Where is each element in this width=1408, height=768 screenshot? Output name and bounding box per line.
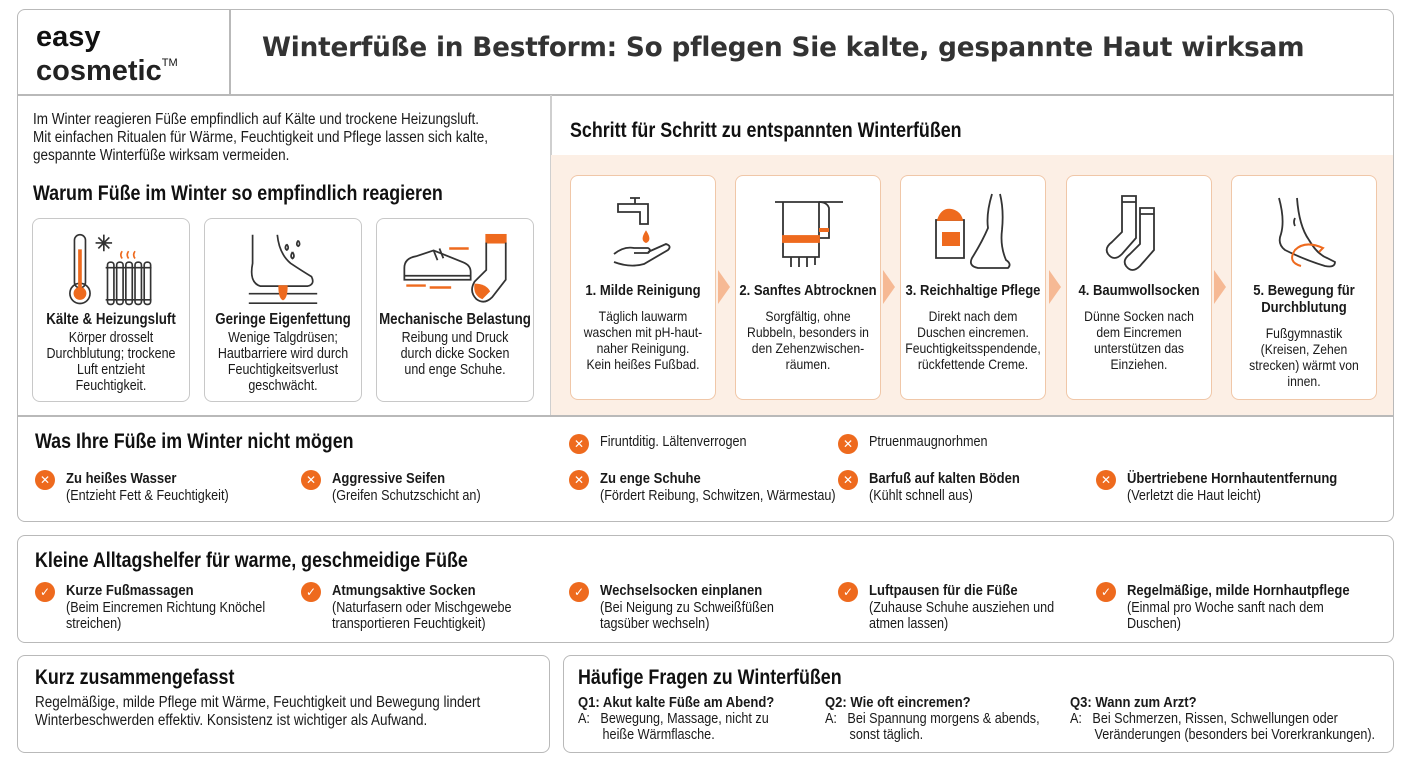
step 3: 3. Reichhaltige Pflege — [906, 282, 1040, 299]
item: enge Schuhe: Zu enge Schuhe — [600, 470, 701, 487]
item 5: (Einmal pro Woche sanft nach dem — [1127, 600, 1324, 616]
panel: alltagshelfer — [17, 535, 1394, 643]
item: heißes Wasser — [35, 470, 229, 504]
item 2 — [301, 582, 512, 632]
heading: warum: Warum Füße im Winter so empfindlich reagieren — [33, 182, 443, 205]
item 5 — [1096, 582, 1350, 632]
card: Kälte: Körper drosselt — [69, 330, 153, 346]
card: Kälte: Durchblutung; trockene — [47, 346, 175, 362]
item 4 — [838, 582, 1054, 632]
panel: FAQ — [563, 655, 1394, 753]
item: heißes Wasser: Zu heißes Wasser — [66, 470, 176, 487]
item 3: Wechselsocken einplanen — [600, 582, 762, 599]
text: ✕ — [574, 437, 584, 451]
panel: alltagshelfer: ✓ — [40, 585, 50, 599]
heading: Kleine Alltagshelfer für warme, geschmeidige Füße — [35, 549, 468, 572]
step 3: rückfettende Creme. — [918, 356, 1028, 372]
item: garbled 2: Ptruenmaugnorhmen — [869, 434, 988, 450]
intro text: gespannte Winterfüße wirksam vermeiden. — [33, 147, 289, 164]
step 2 — [735, 175, 881, 400]
heading: schritte: Schritt für Schritt zu entspannten Winterfüßen — [570, 119, 962, 142]
item: Hornhaut: Übertriebene Hornhautentfernung — [1127, 470, 1337, 487]
panel: alltagshelfer: ✓ — [843, 585, 853, 599]
item: garbled 1 — [569, 434, 747, 454]
card: Mechanische Belastung: und enge Schuhe. — [404, 362, 506, 378]
item: garbled 1: Firuntditig. Lältenverrogen — [600, 434, 747, 450]
text: ✕ — [574, 473, 584, 487]
Q2 — [825, 694, 1040, 743]
step 1 — [570, 175, 716, 400]
step 2: Sorgfältig, ohne — [765, 308, 851, 324]
Q1: A: Bewegung, Massage, nicht zu — [578, 711, 769, 727]
intro text: Mit einfachen Ritualen für Wärme, Feuchtigkeit und Pflege lassen sich kalte, — [33, 129, 488, 146]
item 1: (Beim Eincremen Richtung Knöchel — [66, 600, 265, 616]
step 5 — [1231, 175, 1377, 400]
Q2: sonst täglich. — [850, 727, 923, 743]
arrow — [1049, 270, 1061, 304]
item: Seifen: (Greifen Schutzschicht an) — [332, 488, 481, 504]
logo: easy — [36, 21, 101, 53]
card: Eigenfettung: Wenige Talgdrüsen; — [228, 330, 338, 346]
card: Eigenfettung: Hautbarriere wird durch — [218, 346, 348, 362]
card: Eigenfettung: Geringe Eigenfettung — [215, 311, 351, 328]
intro text: Im Winter reagieren Füße empfindlich auf Kälte und trockene Heizungsluft. — [33, 111, 479, 128]
text: Winterbeschwerden effektiv. Konsistenz ist wichtiger als Aufwand. — [35, 712, 427, 729]
item: Seifen: Aggressive Seifen — [332, 470, 445, 487]
step 1: 1. Milde Reinigung — [585, 282, 701, 299]
item 3: (Bei Neigung zu Schweißfüßen — [600, 600, 774, 616]
card: Mechanische Belastung: durch dicke Socken — [401, 346, 509, 362]
text: ✕ — [843, 437, 853, 451]
item 2: Atmungsaktive Socken — [332, 582, 476, 599]
card: Mechanische Belastung — [376, 218, 534, 402]
item: heißes Wasser: (Entzieht Fett & Feuchtigkeit) — [66, 488, 229, 504]
step 5: Fußgymnastik — [1266, 325, 1342, 341]
item: Barfuß: (Kühlt schnell aus) — [869, 488, 973, 504]
step 5: strecken) wärmt von — [1249, 357, 1359, 373]
item: Hornhaut — [1096, 470, 1337, 504]
logo — [36, 21, 178, 87]
item 5: Regelmäßige, milde Hornhautpflege — [1127, 582, 1350, 599]
card: Kälte: Feuchtigkeit. — [76, 378, 146, 394]
logo: cosmeticTM — [36, 55, 178, 87]
panel: alltagshelfer: ✓ — [1101, 585, 1111, 599]
item 1 — [35, 582, 265, 632]
card: Kälte: Luft entzieht — [77, 362, 145, 378]
panel: steps background — [551, 155, 1393, 415]
card: Mechanische Belastung: Reibung und Druck — [402, 330, 508, 346]
arrow — [1214, 270, 1226, 304]
Q3: Veränderungen (besonders bei Vorerkrankungen). — [1095, 727, 1375, 743]
card: Kälte: Kälte & Heizungsluft — [46, 311, 176, 328]
item 3 — [569, 582, 774, 632]
Q3: Q3: Wann zum Arzt? — [1070, 694, 1197, 711]
item 2: (Naturfasern oder Mischgewebe — [332, 600, 512, 616]
step 2: räumen. — [786, 356, 830, 372]
Q2: Q2: Wie oft eincremen? — [825, 694, 971, 711]
title: Winterfüße in Bestform: So pflegen Sie kalte, gespannte Haut wirksam — [262, 33, 1304, 63]
Q1: heiße Wärmflasche. — [603, 727, 715, 743]
step 5: (Kreisen, Zehen — [1261, 341, 1347, 357]
main frame — [17, 9, 1394, 522]
item: Seifen — [301, 470, 481, 504]
step 4 — [1066, 175, 1212, 400]
text: ✕ — [40, 473, 50, 487]
card: Kälte — [32, 218, 190, 402]
arrow — [718, 270, 730, 304]
panel: alltagshelfer: ✓ — [306, 585, 316, 599]
item 4: (Zuhause Schuhe ausziehen und — [869, 600, 1054, 616]
card: Mechanische Belastung: Mechanische Belastung — [379, 311, 531, 328]
step 3: Direkt nach dem — [929, 308, 1017, 324]
text: Regelmäßige, milde Pflege mit Wärme, Feuchtigkeit und Bewegung lindert — [35, 694, 480, 711]
step 2: den Zehenzwischen- — [752, 340, 864, 356]
card: Eigenfettung: Feuchtigkeitsverlust — [228, 362, 338, 378]
heading: Kurz zusammengefasst — [35, 666, 234, 689]
step 1: waschen mit pH-haut- — [584, 324, 702, 340]
item 4: atmen lassen) — [869, 616, 948, 632]
heading: nicht mögen: Was Ihre Füße im Winter nicht mögen — [35, 430, 354, 453]
item: Barfuß — [838, 470, 1020, 504]
Q3: A: Bei Schmerzen, Rissen, Schwellungen oder — [1070, 711, 1338, 727]
text: ✕ — [306, 473, 316, 487]
text: ✕ — [1101, 473, 1111, 487]
step 1: naher Reinigung. — [597, 340, 689, 356]
card: Eigenfettung — [204, 218, 362, 402]
Q1: Q1: Akut kalte Füße am Abend? — [578, 694, 774, 711]
item 1: streichen) — [66, 616, 121, 632]
step 5: 5. Bewegung für — [1253, 282, 1355, 299]
item 1: Kurze Fußmassagen — [66, 582, 194, 599]
step 4: dem Eincremen — [1096, 324, 1182, 340]
step 4: Dünne Socken nach — [1084, 308, 1194, 324]
item: enge Schuhe: (Fördert Reibung, Schwitzen, Wärmestau) — [600, 488, 836, 504]
step 4: unterstützen das — [1094, 340, 1184, 356]
step 3: Duschen eincremen. — [917, 324, 1029, 340]
item: Barfuß: Barfuß auf kalten Böden — [869, 470, 1020, 487]
Q3 — [1070, 694, 1375, 743]
step 2: 2. Sanftes Abtrocknen — [739, 282, 877, 299]
item: Hornhaut: (Verletzt die Haut leicht) — [1127, 488, 1261, 504]
Q1 — [578, 694, 774, 743]
item: enge Schuhe — [569, 470, 836, 504]
text — [35, 694, 480, 729]
panel: zusammenfassung — [17, 655, 550, 753]
step 1: Täglich lauwarm — [599, 308, 687, 324]
item 3: tagsüber wechseln) — [600, 616, 709, 632]
text: ✕ — [843, 473, 853, 487]
step 3 — [900, 175, 1046, 400]
panel: alltagshelfer: ✓ — [574, 585, 584, 599]
Q2: A: Bei Spannung morgens & abends, — [825, 711, 1040, 727]
heading: Häufige Fragen zu Winterfüßen — [578, 666, 842, 689]
arrow — [883, 270, 895, 304]
item: garbled 2 — [838, 434, 988, 454]
step 3: Feuchtigkeitsspendende, — [905, 340, 1041, 356]
step 5: innen. — [1287, 373, 1321, 389]
card: Eigenfettung: geschwächt. — [248, 378, 318, 394]
step 2: Rubbeln, besonders in — [747, 324, 869, 340]
step 1: Kein heißes Fußbad. — [586, 356, 700, 372]
item 2: transportieren Feuchtigkeit) — [332, 616, 486, 632]
step 4: 4. Baumwollsocken — [1078, 282, 1200, 299]
step 4: Einziehen. — [1111, 356, 1167, 372]
step 5: Durchblutung — [1261, 299, 1347, 316]
intro text — [33, 111, 488, 164]
item 4: Luftpausen für die Füße — [869, 582, 1018, 599]
item 5: Duschen) — [1127, 616, 1181, 632]
